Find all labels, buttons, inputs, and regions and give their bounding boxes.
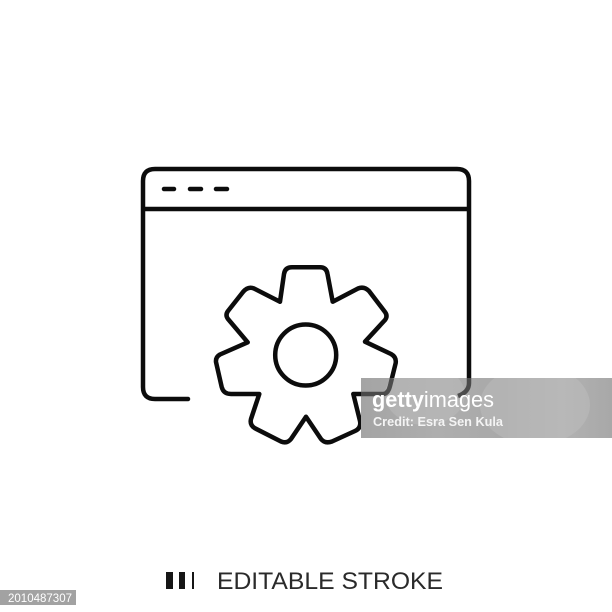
icon: stroke weight bars <box>166 572 194 589</box>
watermark logo text: gettyimages <box>372 387 494 412</box>
watermark band <box>361 378 612 438</box>
image id tag <box>0 590 76 605</box>
icon: browser window <box>143 169 469 399</box>
redrawn dimmed lines under watermark <box>361 378 469 396</box>
watermark credit text: Credit: Esra Sen Kula <box>373 414 504 429</box>
icon: gear hub <box>275 324 336 386</box>
caption: EDITABLE STROKE <box>217 568 443 595</box>
watermark soft shapes <box>385 378 590 438</box>
icon: gear <box>216 267 396 442</box>
image id tag: 2010487307 <box>8 593 72 605</box>
icon: window control dashes <box>164 187 227 191</box>
